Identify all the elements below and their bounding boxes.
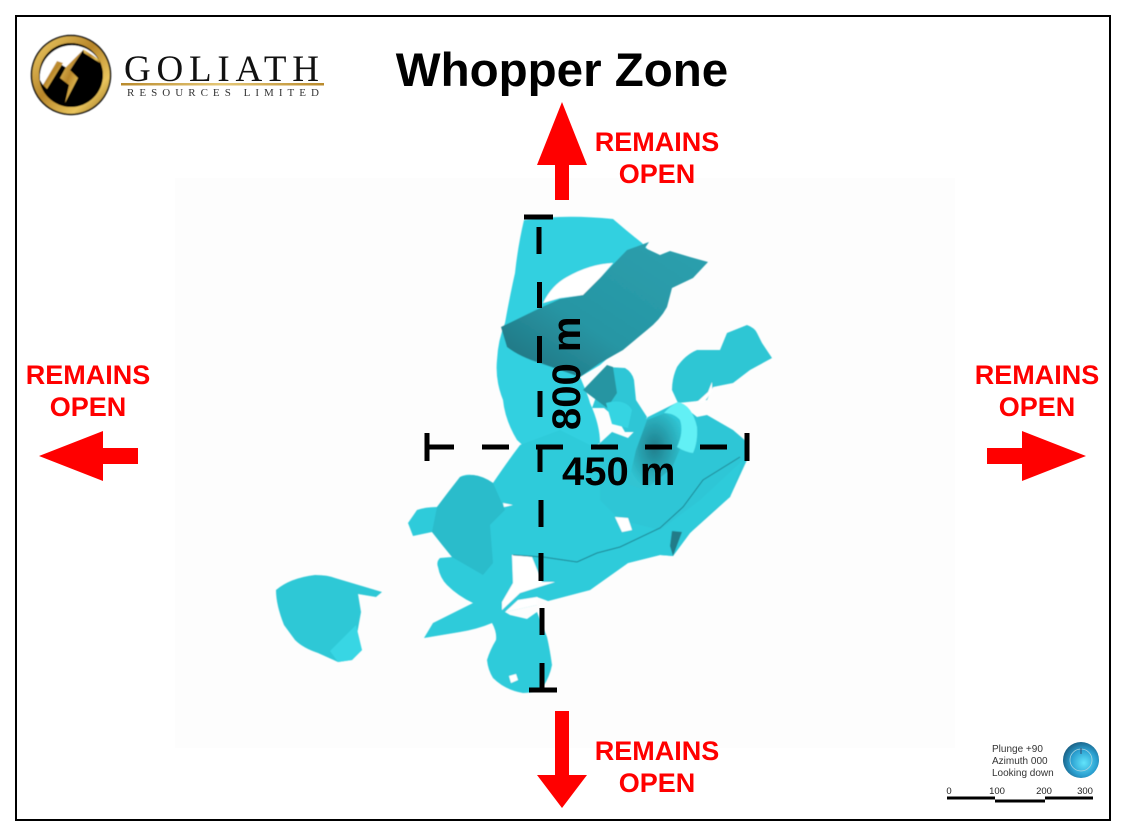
sliver in right arm	[697, 382, 712, 402]
gap between bands	[505, 597, 537, 612]
separate western lobe	[276, 575, 382, 662]
left shaded lobe	[432, 475, 505, 575]
bright highlight	[664, 402, 697, 453]
scale labels: 0	[946, 786, 952, 797]
title: Whopper Zone	[396, 44, 728, 97]
lower mass	[408, 430, 743, 693]
label: remains open east: OPEN	[999, 392, 1075, 422]
view orientation text: Plunge +90	[992, 744, 1043, 755]
logo wordmark: GOLIATH	[124, 49, 319, 90]
label: remains open west: OPEN	[50, 392, 126, 422]
scale labels: 300	[1077, 786, 1093, 797]
logo tagline: RESOURCES LIMITED	[127, 87, 319, 99]
icon: orientation sphere	[1063, 742, 1099, 778]
label: remains open north: REMAINS	[595, 127, 719, 157]
label: remains open west: REMAINS	[26, 360, 150, 390]
scale labels: 200	[1036, 786, 1052, 797]
arrow: north	[537, 102, 587, 200]
small hole in bottom lobe	[509, 674, 518, 683]
label: remains open east: REMAINS	[975, 360, 1099, 390]
central dark fragment	[583, 365, 617, 408]
panel: 3D view background	[175, 178, 955, 748]
small gap in left mass	[503, 503, 513, 507]
dark cluster core	[628, 413, 681, 490]
lower dark sliver	[670, 531, 682, 556]
right arm	[672, 325, 772, 403]
label: 450 m: 450 m	[562, 450, 675, 494]
scale labels: 100	[989, 786, 1005, 797]
3D model: mineralized zone	[276, 217, 772, 693]
label: remains open south: OPEN	[619, 768, 695, 798]
icon: gold ring with lightning bolt	[32, 36, 110, 114]
label: 800 m: 800 m	[545, 317, 589, 430]
small hole in band	[615, 517, 632, 532]
dimension: 800 m vertical	[524, 217, 557, 690]
central blob	[592, 367, 647, 432]
opening in upper lobe	[543, 263, 613, 303]
view orientation text: Azimuth 000	[992, 756, 1048, 767]
logo gold rule	[121, 83, 324, 86]
western lobe highlight	[330, 625, 362, 662]
label: remains open north: OPEN	[619, 159, 695, 189]
arrow: south	[537, 711, 587, 808]
arrow: west	[39, 431, 138, 481]
arrow: east	[987, 431, 1086, 481]
view orientation text: Looking down	[992, 768, 1054, 779]
upper lobe	[497, 217, 655, 480]
label: remains open south: REMAINS	[595, 736, 719, 766]
dimension: 450 m horizontal	[427, 433, 747, 461]
dark plate	[501, 242, 708, 377]
central cluster	[520, 402, 747, 601]
scale bar	[946, 786, 1093, 802]
gap below band	[502, 555, 555, 610]
fracture line	[513, 457, 740, 562]
logo: Goliath Resources Limited	[32, 36, 324, 114]
inner fragment	[606, 402, 632, 428]
